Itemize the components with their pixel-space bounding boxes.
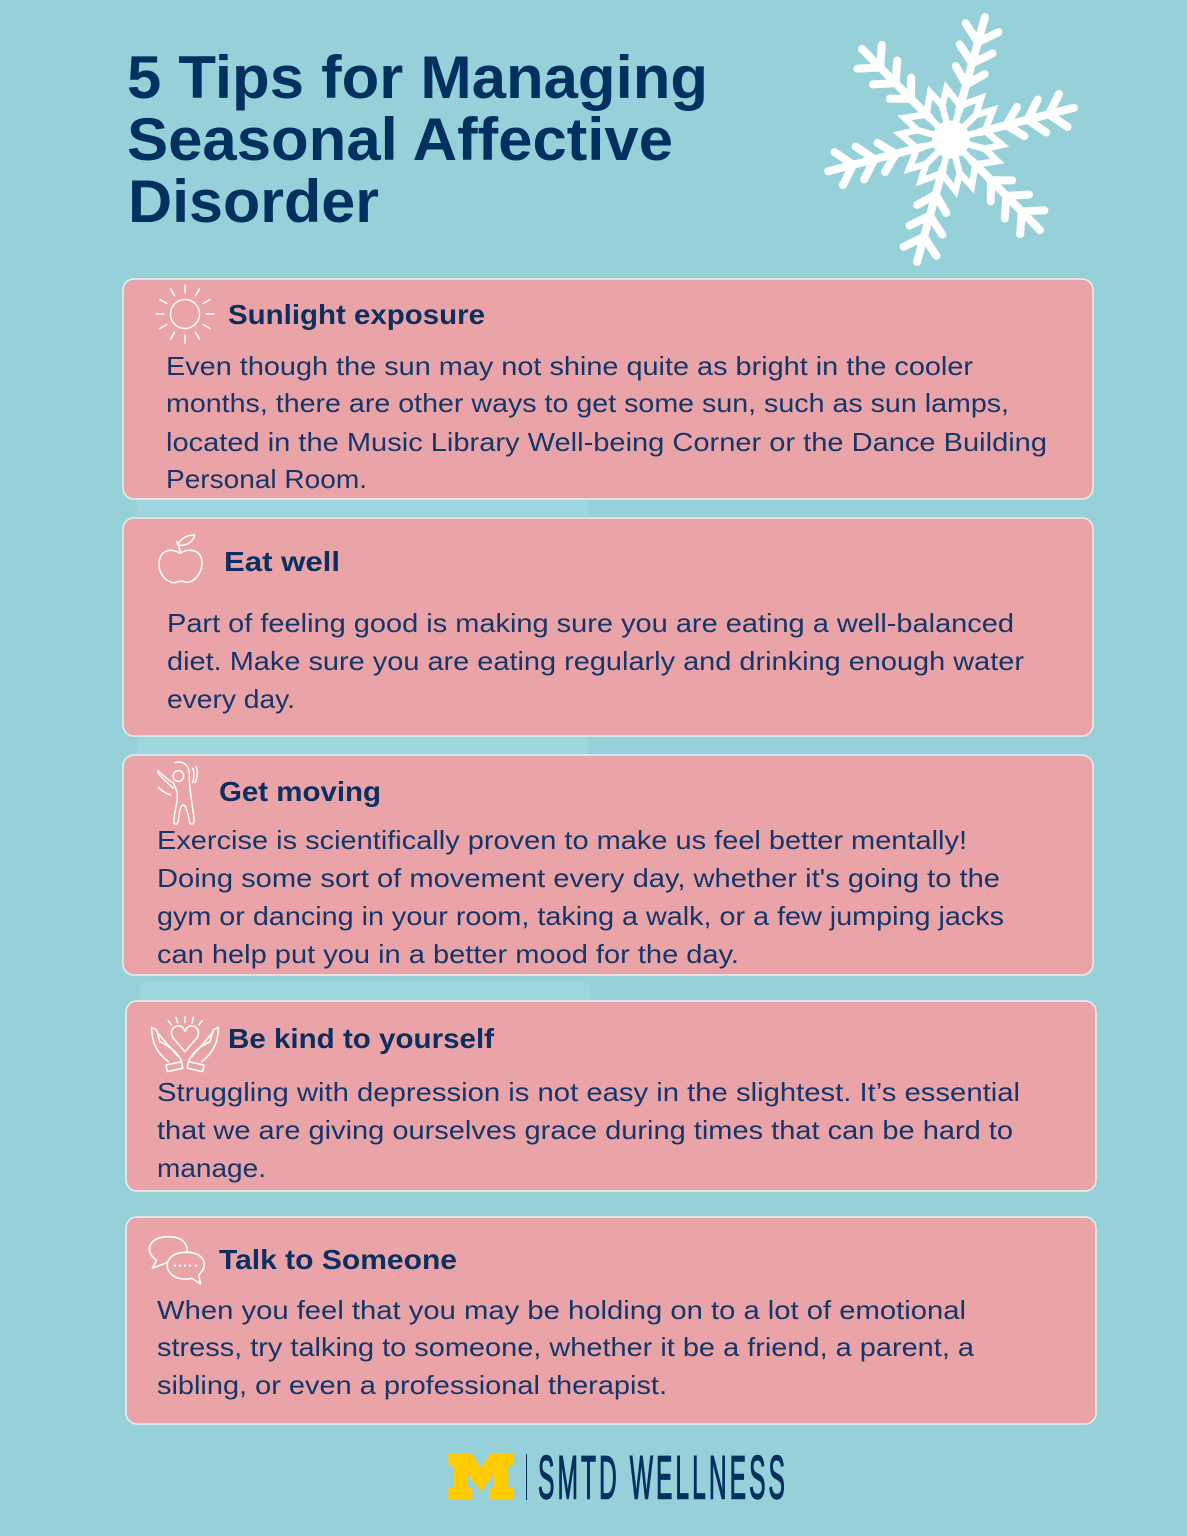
heading: eat well: Eat well [224, 546, 340, 577]
icon: speech bubbles [149, 1237, 204, 1284]
heading: get moving: Get moving [219, 776, 381, 807]
body text: eat well: diet. Make sure you are eating regularly and drinking enough water [167, 646, 1024, 676]
icon: hands holding heart [152, 1017, 218, 1072]
icon: sun [156, 285, 214, 343]
panel: sunlight exposure [123, 279, 1093, 499]
icon: snowflake [824, 12, 1078, 267]
body text: get moving: Exercise is scientifically proven to make us feel better mentally! [157, 825, 967, 855]
title: Disorder [128, 168, 379, 235]
body text: sunlight exposure: located in the Music Library Well-being Corner or the Dance Building [166, 427, 1047, 457]
body text: get moving: Doing some sort of movement every day, whether it's going to the [157, 863, 1000, 893]
body text: talk to someone: When you feel that you may be holding on to a lot of emotional [157, 1295, 966, 1325]
logo: SMTD Wellness [448, 1443, 788, 1512]
body text: get moving: can help put you in a better mood for the day. [157, 939, 739, 969]
body text: eat well: every day. [167, 684, 295, 714]
icon: apple [159, 535, 202, 583]
icon: dancing person [158, 762, 197, 824]
icon: block M [448, 1454, 513, 1499]
body text: sunlight exposure: Personal Room. [166, 464, 367, 494]
title: 5 Tips for Managing [127, 44, 708, 111]
heading: be kind to yourself: Be kind to yourself [228, 1023, 495, 1054]
body text: talk to someone: stress, try talking to someone, whether it be a friend, a parent, a [157, 1332, 975, 1362]
title [127, 44, 708, 235]
body text: be kind to yourself: Struggling with depression is not easy in the slightest. It’s essential [157, 1077, 1020, 1107]
body text: talk to someone [157, 1295, 975, 1400]
title: Seasonal Affective [127, 106, 673, 173]
body text: eat well [167, 608, 1024, 714]
body text: get moving: gym or dancing in your room, taking a walk, or a few jumping jacks [157, 901, 1004, 931]
body text: sunlight exposure: Even though the sun may not shine quite as bright in the cooler [166, 351, 973, 381]
heading: talk to someone: Talk to Someone [219, 1244, 457, 1275]
body text: be kind to yourself: that we are giving ourselves grace during times that can be hard to [157, 1115, 1013, 1145]
panel: get moving [123, 755, 1093, 975]
body text: be kind to yourself [157, 1077, 1020, 1183]
body text: eat well: Part of feeling good is making sure you are eating a well-balanced [167, 608, 1014, 638]
body text: get moving [157, 825, 1004, 969]
body text: sunlight exposure [166, 351, 1047, 494]
panel: be kind to yourself [126, 1001, 1096, 1191]
wordmark: SMTD WELLNESS [538, 1443, 788, 1512]
body text: sunlight exposure: months, there are other ways to get some sun, such as sun lamps, [166, 388, 1009, 418]
body text: talk to someone: sibling, or even a professional therapist. [157, 1370, 667, 1400]
body text: be kind to yourself: manage. [157, 1153, 266, 1183]
heading: sunlight exposure: Sunlight exposure [228, 299, 485, 330]
panel: talk to someone [126, 1217, 1096, 1424]
panel: eat well [123, 518, 1093, 736]
